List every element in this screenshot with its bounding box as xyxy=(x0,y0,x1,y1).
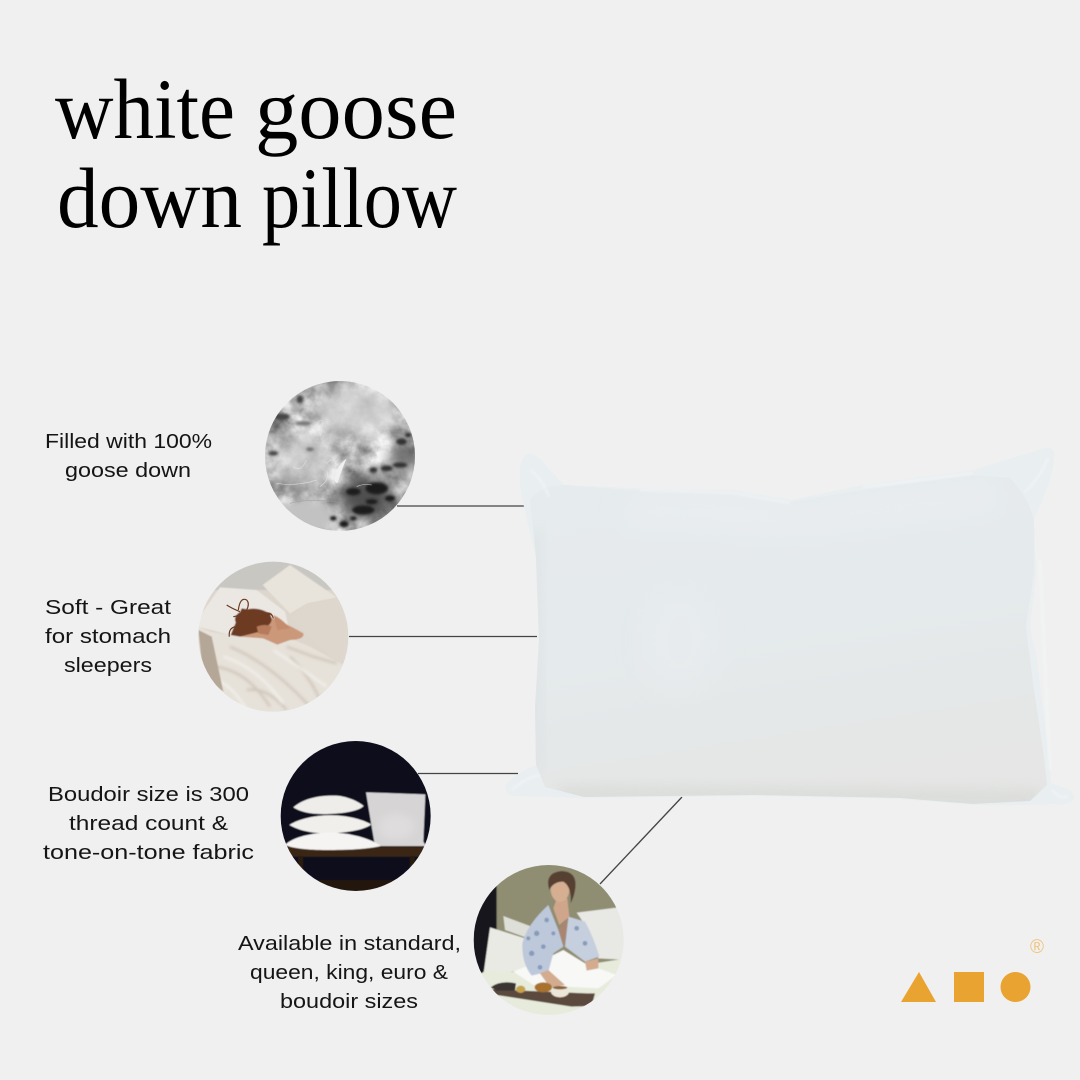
label: available sizes: queen, king, euro & xyxy=(250,961,448,984)
title: down xyxy=(57,150,242,246)
image circle: goose down xyxy=(263,380,418,533)
label: goose down: Filled with 100% xyxy=(45,430,212,453)
image circle: stacked pillows on bench xyxy=(280,740,433,893)
bedding xyxy=(481,959,621,1015)
dark feather cluster xyxy=(338,478,395,518)
title: white xyxy=(55,61,235,157)
robe xyxy=(522,905,563,976)
label: boudoir size: Boudoir size is 300 xyxy=(48,783,249,806)
label: available sizes: Available in standard, xyxy=(238,932,461,955)
label: boudoir size xyxy=(43,783,254,864)
image circle: woman with breakfast tray xyxy=(473,863,627,1020)
pillow flange outline xyxy=(506,448,1074,805)
label: stomach sleepers xyxy=(45,596,171,677)
pillow corner seams xyxy=(512,458,1068,797)
label: available sizes xyxy=(238,932,461,1013)
fibres xyxy=(277,420,372,503)
sleeper xyxy=(240,617,303,645)
label: stomach sleepers: for stomach xyxy=(45,625,171,648)
label: goose down xyxy=(45,430,212,482)
label: available sizes: boudoir sizes xyxy=(280,990,418,1013)
logo: triangle, square, circle xyxy=(901,972,1030,1002)
pillow body xyxy=(534,539,1047,804)
stacked pillows xyxy=(293,796,364,814)
label: stomach sleepers: sleepers xyxy=(64,654,152,677)
title: pillow xyxy=(262,150,457,246)
label: stomach sleepers: Soft - Great xyxy=(45,596,171,619)
bed pillows xyxy=(483,927,527,975)
connector line: available sizes xyxy=(600,797,682,884)
title xyxy=(55,61,457,246)
square pillow xyxy=(366,792,426,846)
connector line: goose down xyxy=(397,505,524,507)
connector line: boudoir size xyxy=(418,772,518,774)
registered mark: ® xyxy=(1030,937,1044,958)
label: boudoir size: thread count & xyxy=(69,812,228,835)
pillow image xyxy=(524,475,1047,804)
label: boudoir size: tone-on-tone fabric xyxy=(43,841,254,864)
label: goose down: goose down xyxy=(65,459,191,482)
image circle: woman sleeping in bed xyxy=(197,560,350,717)
connector line: stomach sleepers xyxy=(349,636,537,638)
tray xyxy=(492,989,595,1007)
title: goose xyxy=(255,61,457,157)
head xyxy=(553,898,569,925)
